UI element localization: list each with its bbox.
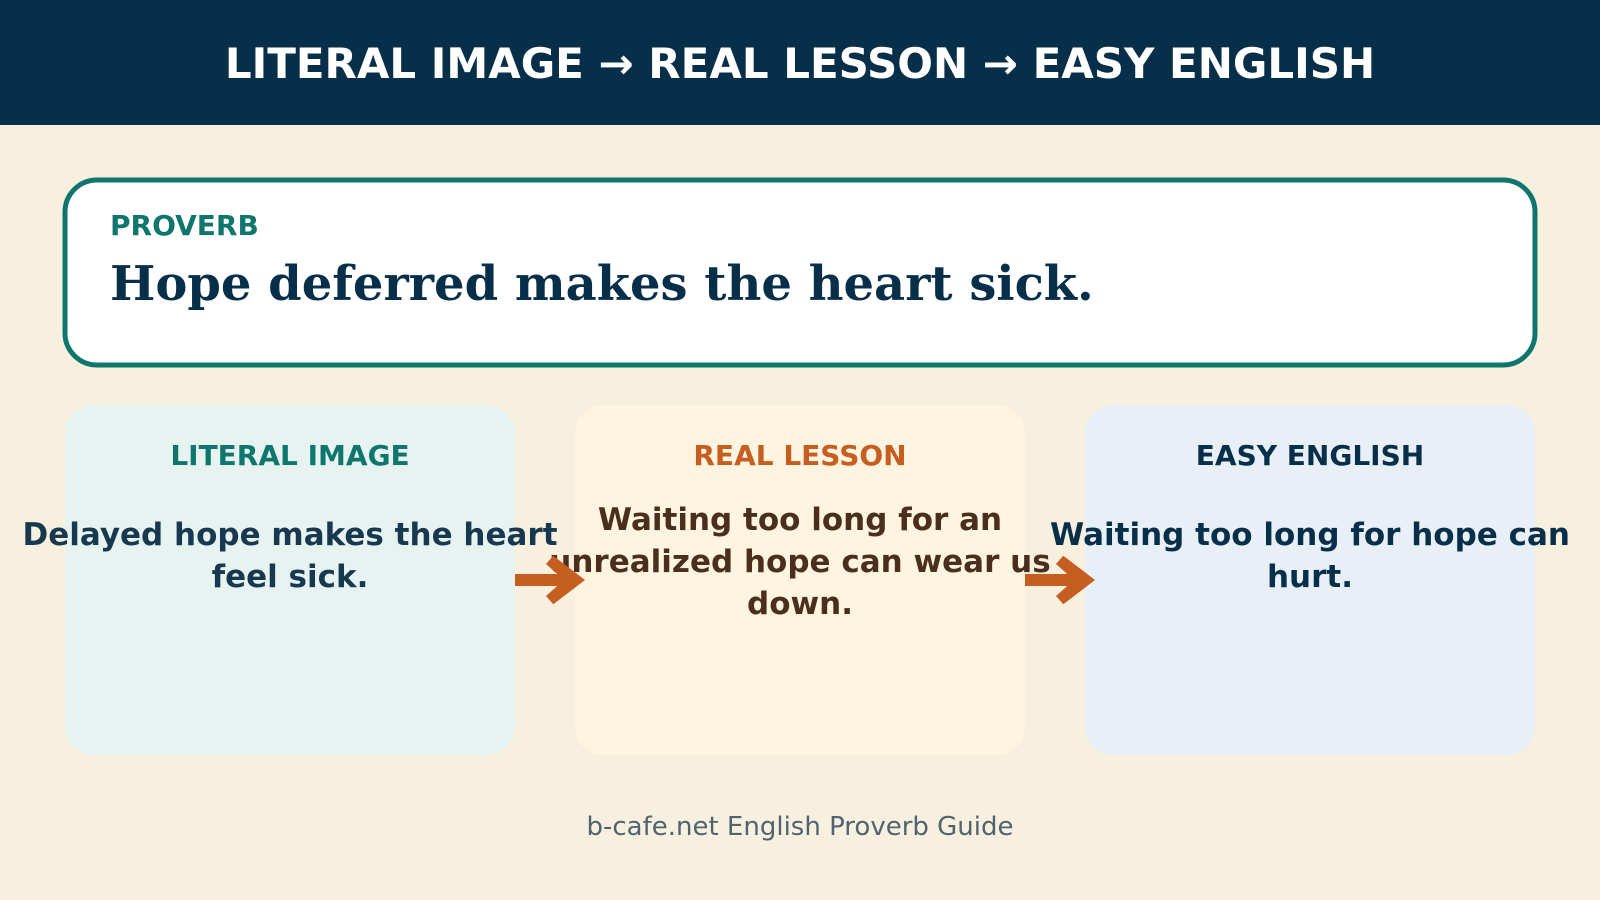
panel: proverb [65,180,1535,365]
proverb text: Hope deferred makes the heart sick. [110,256,1094,312]
literal image body: feel sick. [212,559,368,595]
footer: b-cafe.net English Proverb Guide [586,812,1014,842]
panel: easy english [1050,405,1570,755]
real lesson body: Waiting too long for an [598,502,1002,538]
header banner [0,0,1600,125]
easy english body: hurt. [1267,559,1353,595]
easy english body: Waiting too long for hope can [1050,517,1570,553]
arrow: real lesson to easy english [1025,556,1095,604]
arrow: literal image to real lesson [515,556,585,604]
panel: real lesson [549,405,1051,755]
easy english heading: EASY ENGLISH [1196,439,1424,472]
literal image body: Delayed hope makes the heart [22,517,558,553]
literal image heading: LITERAL IMAGE [170,439,410,472]
real lesson heading: REAL LESSON [693,439,907,472]
real lesson body: unrealized hope can wear us [549,544,1051,580]
panel: literal image [22,405,558,755]
title: LITERAL IMAGE → REAL LESSON → EASY ENGLISH [225,39,1375,88]
proverb label: PROVERB [110,209,259,242]
real lesson body: down. [747,586,853,622]
